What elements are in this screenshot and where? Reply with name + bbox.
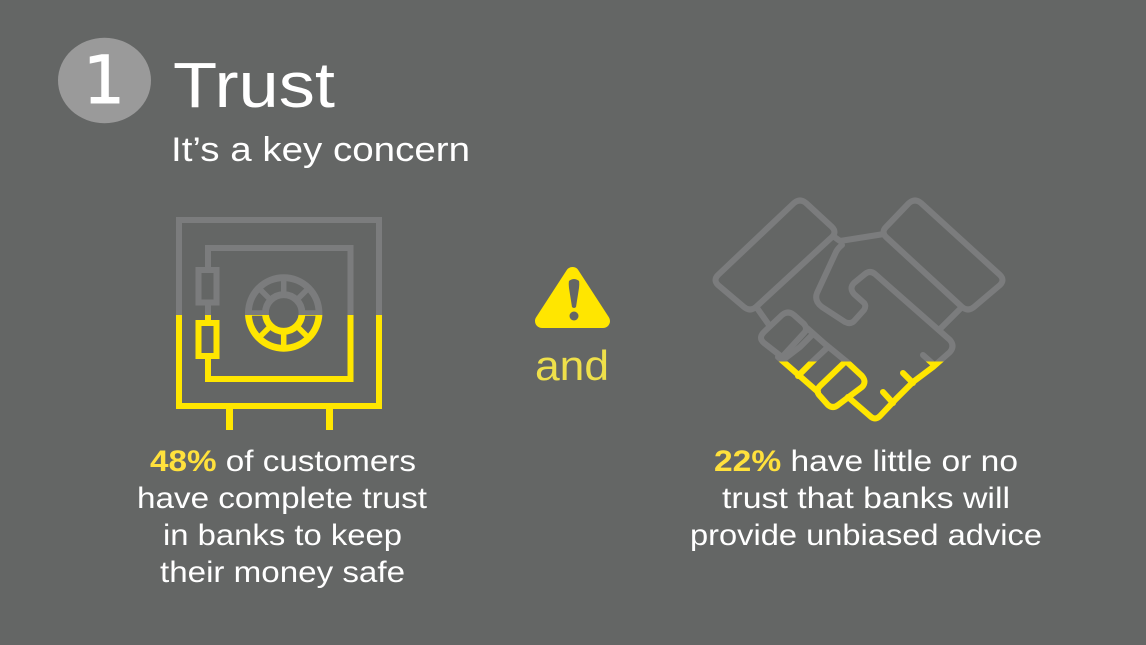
text block: 22% little or no trust: 22% have little or no (714, 445, 1018, 478)
text block: 48% complete trust: their money safe (160, 556, 405, 589)
text block: 48% complete trust: 48% of customers (150, 445, 416, 478)
number badge: 1 (83, 42, 125, 119)
text block: 48% complete trust: have complete trust (137, 482, 428, 515)
icon: handshake, 22% filled (716, 200, 1002, 418)
number badge (58, 38, 151, 123)
title: Trust (173, 49, 335, 121)
text block: 22% little or no trust (690, 445, 1042, 552)
connector word: and: and (535, 342, 609, 389)
text block: 48% complete trust: in banks to keep (163, 519, 402, 552)
text block: 22% little or no trust: trust that banks will (722, 482, 1010, 515)
subtitle: It’s a key concern (171, 131, 470, 169)
text block: 48% complete trust (137, 445, 428, 589)
icon: warning triangle (542, 274, 603, 321)
icon: safe, 48% filled (179, 220, 379, 430)
text block: 22% little or no trust: provide unbiased advice (690, 519, 1042, 552)
